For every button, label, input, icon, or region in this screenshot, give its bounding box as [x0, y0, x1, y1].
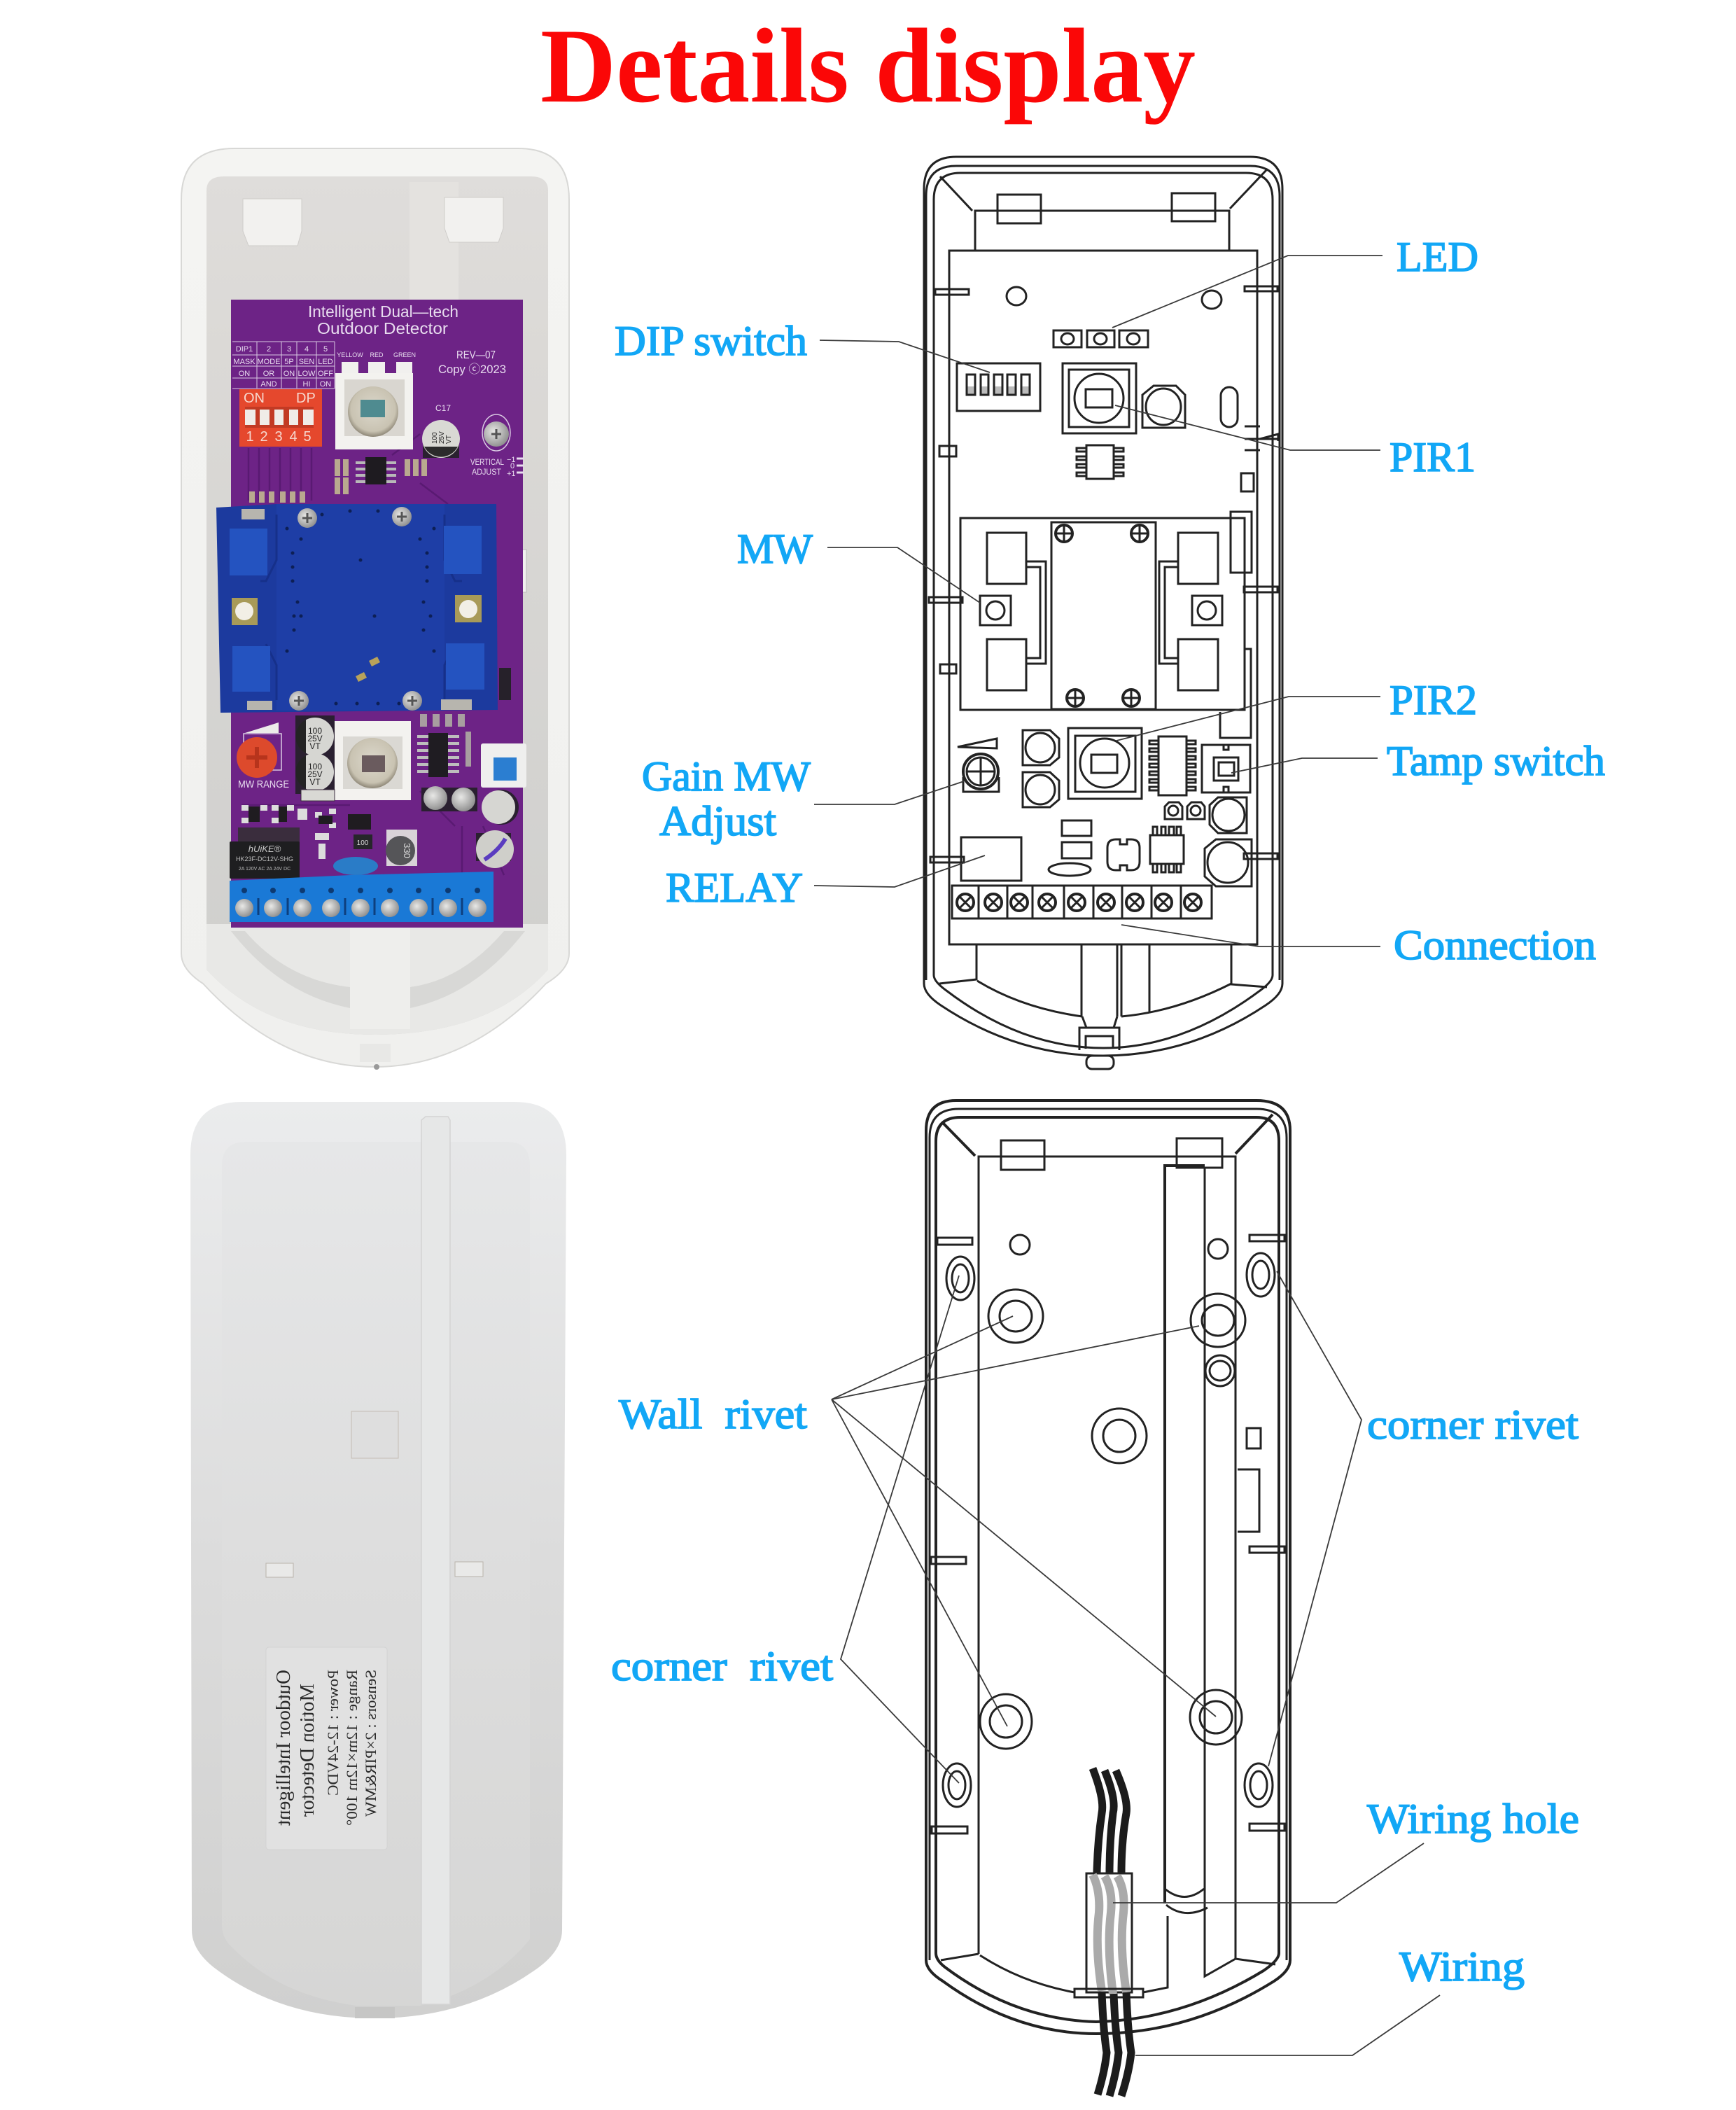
labels: rear drawing: Wall rivet: [619, 1391, 807, 1437]
IC and resistors lower board: 100: [357, 839, 369, 847]
blue varistor: [333, 857, 378, 875]
orange gain potentiometer: MW RANGE: [238, 778, 289, 790]
side slots and marks: [929, 286, 1278, 862]
product label: Range : 12m×12m 100°: [343, 1670, 360, 1826]
inductor: [386, 830, 417, 866]
blue screw terminal block: [230, 872, 493, 922]
relay: 2A 120V AC 2A 24V DC: [239, 867, 290, 872]
blue microwave module: [216, 504, 498, 713]
capacitors beside PIR2: 100: [308, 726, 322, 736]
electrolytic capacitor C17: C17: [435, 403, 451, 413]
dip table: RED: [370, 351, 384, 358]
board heading: Intelligent Dual—tech: [308, 302, 458, 321]
circuit board outline: [949, 251, 1257, 944]
product label: [266, 1647, 387, 1850]
board heading: [308, 302, 506, 376]
dip table: ON: [239, 370, 250, 378]
PIR1 sensor on photo: [335, 362, 413, 449]
U3 chip and small parts: [249, 457, 427, 503]
line drawing: detector rear: [926, 1101, 1290, 2096]
back shell: [190, 1102, 566, 2018]
side tab: [507, 550, 526, 592]
dip table: [232, 342, 416, 389]
dip table: MODE: [258, 358, 280, 366]
LEDs: [1054, 330, 1148, 347]
labels: front drawing: Adjust: [659, 798, 776, 844]
dip table: LOW: [298, 370, 316, 378]
dip table: GREEN: [393, 351, 416, 358]
relay: hUiKE®: [248, 844, 281, 854]
dip table: ON: [320, 380, 331, 389]
dip table: 5: [323, 345, 328, 354]
red dip switch: ON: [244, 391, 265, 406]
back face: [222, 1142, 530, 2006]
PIR1 drawing: [1063, 363, 1136, 433]
red dip switch: 2: [260, 429, 268, 445]
vertical adjust screw: VERTICAL: [470, 457, 504, 467]
rear small holes: [1010, 1235, 1228, 1259]
terminal block drawing: [952, 886, 1212, 918]
red dip switch: 3: [274, 429, 283, 445]
electrolytic capacitor C17: 25V: [438, 431, 446, 444]
labels: front drawing: LED: [1396, 234, 1478, 280]
labels: front drawing: Tamp switch: [1387, 738, 1605, 784]
title: Details display: [540, 7, 1196, 125]
labels: front drawing: PIR2: [1390, 677, 1477, 723]
cable and sleeve: [1074, 1768, 1143, 2096]
product label: Power : 12-24VDC: [324, 1670, 342, 1796]
dip table: LED: [318, 358, 333, 366]
board traces: [241, 434, 504, 875]
red dip switch: DP: [296, 391, 316, 406]
labels: front drawing: MW: [737, 526, 813, 572]
electrolytic capacitor C17: [422, 403, 460, 458]
dip table: SEN: [299, 358, 314, 366]
capacitors beside PIR2: [295, 715, 335, 794]
dip table: HI: [302, 380, 311, 389]
purple circuit board: [231, 300, 523, 928]
small lower components: [1049, 797, 1252, 886]
capacitor beside PIR1: [1142, 386, 1185, 428]
IC and resistors lower board: [241, 714, 471, 859]
relay drawing: [961, 837, 1021, 881]
vertical adjust screw: 0: [510, 462, 514, 470]
top clips: [997, 193, 1215, 223]
photo: open detector with circuit board: [181, 148, 569, 1070]
dip table: YELLOW: [337, 351, 363, 358]
tamper switch on photo: [481, 743, 526, 788]
red dip switch: 5: [303, 429, 312, 445]
electrolytic capacitor C17: VT: [445, 435, 453, 444]
tamper switch drawing: [1202, 745, 1250, 792]
capacitors beside PIR2 drawing: [1023, 730, 1059, 807]
dip table: OFF: [318, 370, 333, 378]
relay: [230, 827, 300, 879]
labels: front drawing: RELAY: [666, 865, 803, 911]
board heading: Outdoor Detector: [317, 319, 448, 337]
dip table: AND: [260, 380, 277, 389]
back slots: [266, 1562, 483, 1577]
capacitors beside PIR2: VT: [309, 741, 321, 751]
capacitors beside PIR2: 25V: [307, 769, 323, 779]
leader lines: front drawing: [814, 256, 1382, 946]
dip table: 4: [304, 345, 309, 354]
corner rivets drawing: [943, 1253, 1275, 1807]
small capacitors lower right: [421, 786, 519, 868]
rear channel: [1165, 1166, 1236, 1976]
vertical adjust screw: ADJUST: [472, 467, 502, 477]
dip table: 3: [287, 345, 291, 354]
capacitors beside PIR2: 25V: [307, 734, 323, 743]
case shell: [181, 148, 569, 1067]
red dip switch: 1: [246, 429, 254, 445]
dip table: 2: [267, 345, 271, 354]
vertical adjust screw: +1: [507, 470, 516, 478]
orange gain potentiometer: [237, 722, 289, 790]
labels: rear drawing: Wiring: [1399, 1943, 1525, 1990]
red dip switch: 4: [289, 429, 298, 445]
chip under PIR1: [1077, 445, 1124, 479]
dip table: ON: [284, 370, 295, 378]
photo: detector back cover: [190, 1102, 566, 2018]
labels: rear drawing: corner rivet: [1367, 1402, 1578, 1448]
red dip switch: [239, 389, 322, 447]
capacitors beside PIR2: VT: [309, 777, 321, 787]
dip table: DIP1: [236, 345, 253, 354]
mounting clips: [243, 197, 503, 246]
housing outline: [924, 157, 1282, 1056]
rear clips: [1001, 1138, 1222, 1170]
labels: rear drawing: [611, 1391, 1579, 1990]
wall rivets drawing: [980, 1290, 1245, 1749]
labels: front drawing: DIP switch: [615, 318, 807, 364]
product label: Sensors : 2×PIR&MW: [362, 1670, 379, 1817]
product label: Outdoor Intelligent: [273, 1670, 295, 1826]
board heading: REV—07: [456, 349, 496, 361]
vertical adjust screw: −1: [507, 456, 516, 464]
gain adjust drawing: [958, 739, 999, 792]
board heading: Copy ⓒ2023: [438, 363, 506, 376]
PIR2 drawing: [1068, 728, 1142, 799]
labels: front drawing: Gain MW: [642, 753, 811, 799]
vertical adjust screw: [470, 414, 524, 478]
center ridge: [421, 1117, 450, 2004]
case interior: [206, 176, 548, 1035]
DIP switch drawing: [957, 363, 1040, 411]
bottom notch: [355, 2007, 395, 2018]
capacitors beside PIR2: 100: [308, 762, 322, 771]
dip table: 5P: [284, 358, 294, 366]
housing lower details: [939, 944, 1267, 1069]
PIR2 sensor on photo: [335, 721, 411, 800]
labels: front drawing: PIR1: [1390, 434, 1476, 480]
MW module drawing: [960, 518, 1251, 738]
rear housing outline: [926, 1101, 1290, 2034]
electrolytic capacitor C17: 100: [431, 432, 439, 444]
product label: Motion Detector: [297, 1684, 318, 1817]
rear slots: [931, 1235, 1284, 1833]
dip table: OR: [263, 370, 274, 378]
inset square: [351, 1411, 398, 1458]
inductor: 330: [402, 843, 412, 858]
labels: rear drawing: corner rivet: [611, 1643, 833, 1689]
line drawing: detector front: [924, 157, 1282, 1069]
leader lines: rear drawing: [832, 1271, 1440, 2055]
labels: front drawing: Connection: [1394, 922, 1596, 968]
small black part on right: [499, 668, 511, 700]
labels: rear drawing: Wiring hole: [1367, 1796, 1579, 1842]
relay: HK23F-DC12V-SHG: [236, 855, 293, 862]
dip table: MASK: [233, 358, 255, 366]
chip beside PIR2: [1149, 736, 1196, 795]
labels: front drawing: [615, 234, 1605, 968]
